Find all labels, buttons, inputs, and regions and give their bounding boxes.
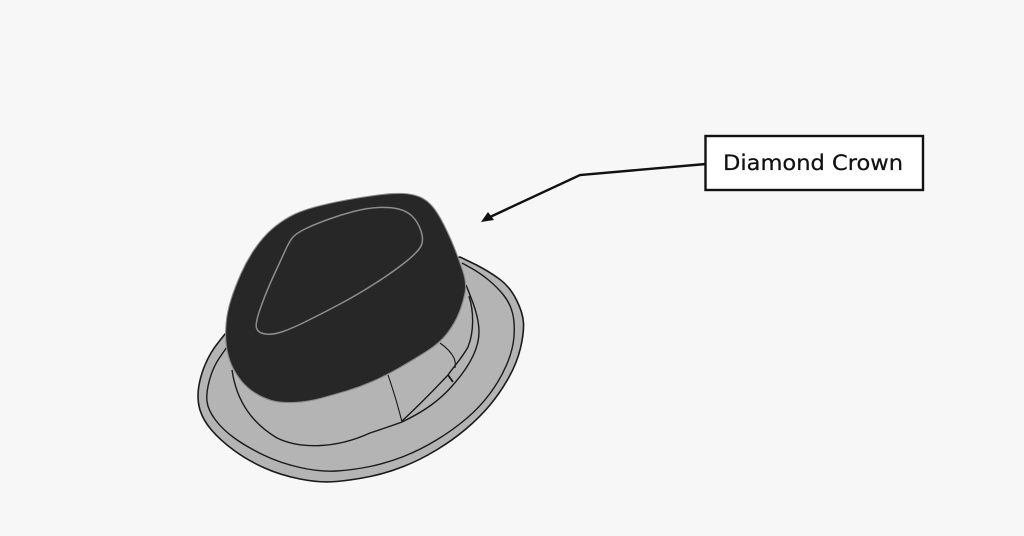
- hat band: [232, 285, 479, 446]
- diamond crown: [226, 193, 466, 403]
- hat brim: [198, 257, 524, 482]
- icon: fedora hat: [198, 193, 524, 482]
- callout: Diamond Crown: Diamond Crown: [723, 151, 903, 175]
- callout: Diamond Crown: [706, 136, 923, 190]
- crown dent: [256, 207, 422, 334]
- arrow: callout pointer to crown: [481, 164, 706, 222]
